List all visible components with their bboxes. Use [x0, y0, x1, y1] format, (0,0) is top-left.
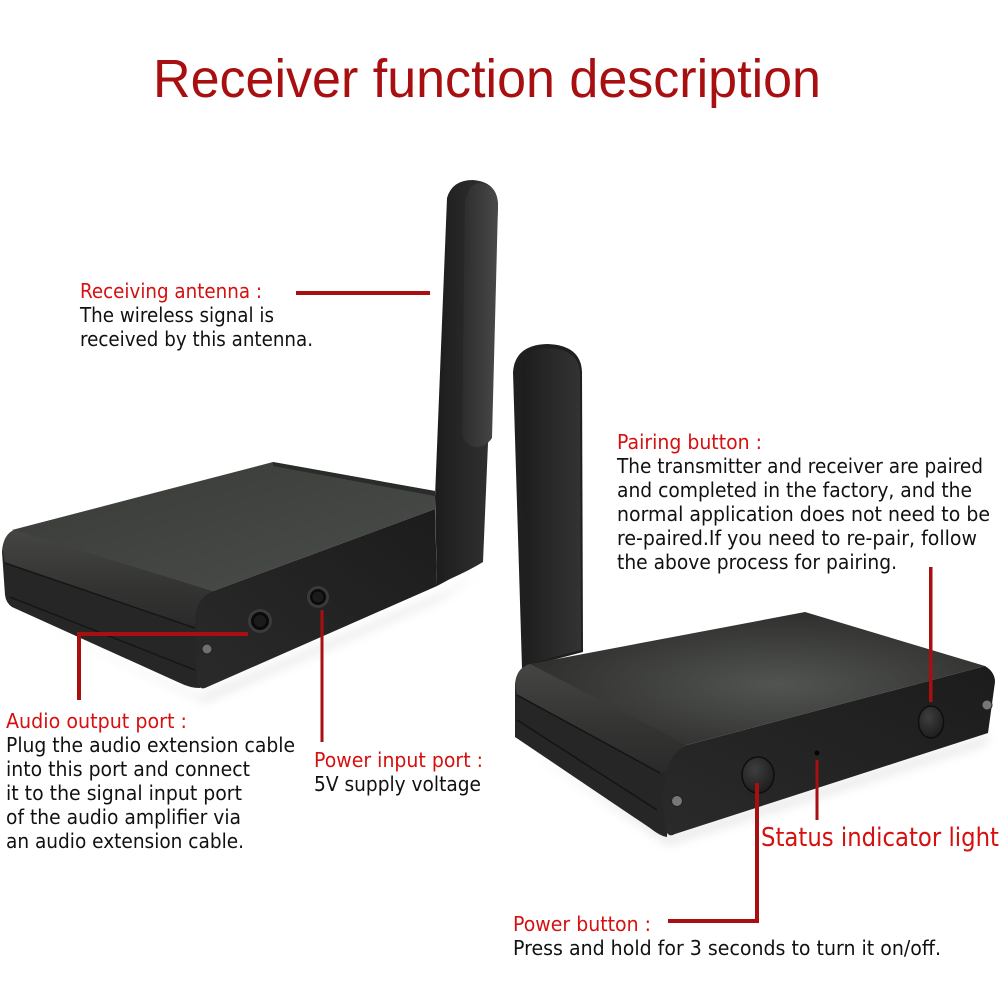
leader line: audio output port [79, 634, 248, 700]
callout: audio output port: an audio extension cable. [6, 829, 244, 853]
enclosure body outline [515, 664, 687, 837]
callout: pairing button: and completed in the factory, and the [617, 478, 972, 502]
power input jack [307, 586, 329, 608]
callout: power button: Power button : [513, 912, 651, 936]
leader line: receiving antenna [296, 291, 430, 295]
callout: pairing button: Pairing button : [617, 430, 762, 454]
screw left [672, 796, 682, 806]
antenna [513, 344, 583, 668]
callout: audio output port: into this port and connect [6, 757, 250, 781]
side rail grooves [517, 695, 660, 810]
callout: receiving antenna: The wireless signal is [79, 303, 274, 327]
enclosure top face [12, 462, 435, 591]
leader line: power input port [320, 610, 324, 742]
callout: audio output port [6, 709, 295, 853]
audio output jack [248, 609, 272, 633]
callout: power input port [314, 748, 483, 796]
callout: receiving antenna [79, 279, 313, 351]
callout: power input port: 5V supply voltage [314, 772, 481, 796]
status LED [814, 750, 820, 756]
side rail upper band [3, 530, 213, 628]
leader line: status indicator [816, 760, 818, 820]
ground shadow [530, 735, 990, 845]
enclosure top face [525, 612, 985, 745]
leader line: pairing button [929, 567, 932, 702]
callout: audio output port: Audio output port : [6, 709, 187, 733]
ground shadow [40, 572, 480, 702]
side rail grooves [5, 563, 195, 670]
title: Receiver function description [153, 49, 821, 109]
enclosure body outline [2, 530, 213, 688]
power button [742, 757, 774, 793]
screw right [982, 700, 992, 710]
callout: receiving antenna: Receiving antenna : [80, 279, 262, 303]
antenna [435, 180, 498, 586]
callout: power button: Press and hold for 3 seconds to turn it on/off. [513, 936, 941, 960]
right receiver photo [513, 344, 995, 845]
callout: audio output port: Plug the audio extension cable [6, 733, 295, 757]
top rim [273, 462, 435, 496]
callout: audio output port: it to the signal input port [6, 781, 242, 805]
callout: pairing button: the above process for pairing. [617, 550, 897, 574]
callout: audio output port: of the audio amplifier via [6, 805, 241, 829]
side rail upper band [515, 664, 687, 773]
callout: receiving antenna: received by this antenna. [80, 327, 313, 351]
leader line: power button [668, 783, 757, 921]
callout: power input port: Power input port : [314, 748, 483, 772]
left receiver photo [2, 180, 498, 702]
pairing button [918, 706, 944, 738]
callout: power button [513, 912, 941, 960]
enclosure front face [662, 666, 995, 835]
callout: pairing button: re-paired.If you need to re-pair, follow [617, 526, 977, 550]
callout: pairing button [616, 430, 990, 574]
screw [202, 644, 212, 654]
antenna face [521, 348, 581, 664]
enclosure front face [196, 509, 437, 688]
